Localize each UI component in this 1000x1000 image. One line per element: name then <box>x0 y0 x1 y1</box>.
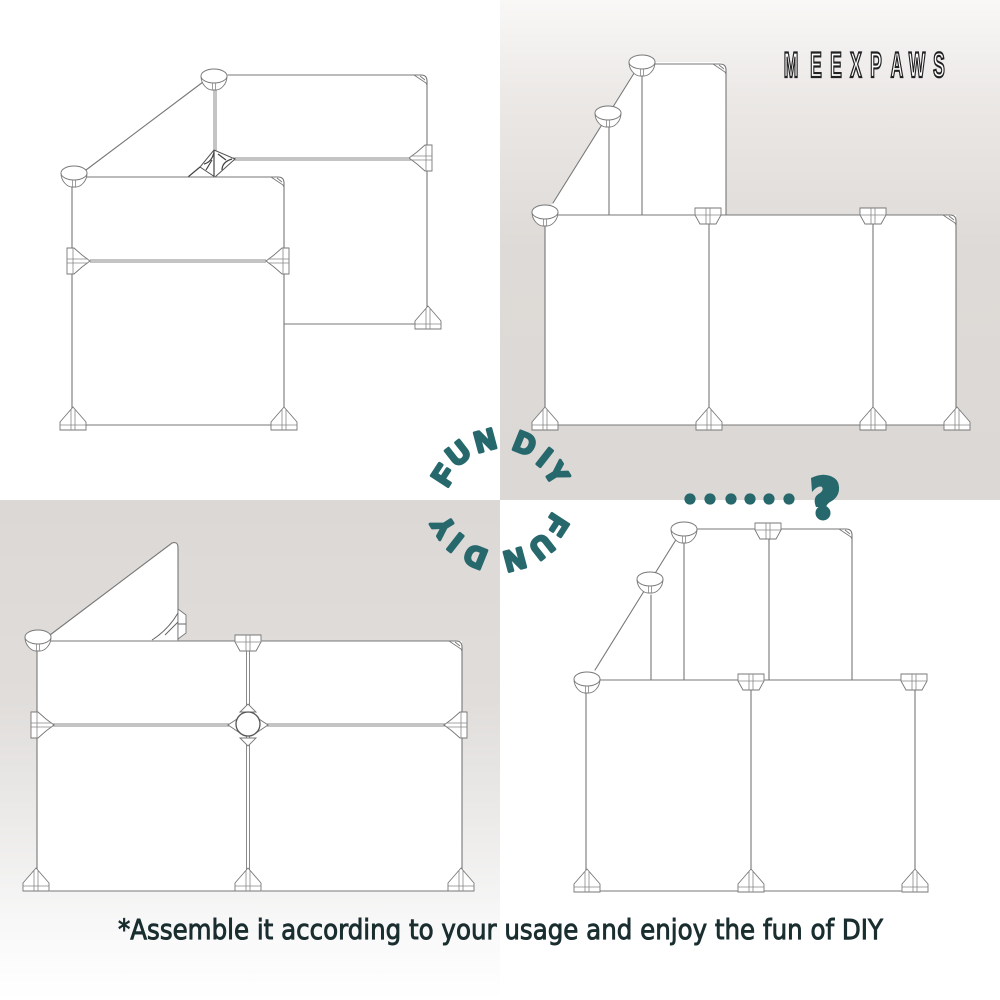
caption: *Assemble it according to your usage and enjoy the fun of DIY <box>118 913 884 946</box>
panel: front <box>72 177 284 425</box>
icon: question mark <box>811 475 839 520</box>
logo: MeexPaws: X <box>850 45 862 85</box>
diagram: bottom-right layout <box>574 522 928 892</box>
heading: FUN DIY upper arc: U <box>441 435 477 473</box>
logo: MeexPaws <box>784 45 945 85</box>
logo: MeexPaws: P <box>870 45 882 85</box>
logo: MeexPaws: E <box>810 45 822 85</box>
heading: FUN DIY lower arc: Y <box>426 510 463 543</box>
heading: FUN DIY lower arc: N <box>500 540 529 577</box>
heading: FUN DIY upper arc: D <box>509 426 540 463</box>
logo: MeexPaws: W <box>909 45 926 85</box>
logo: MeexPaws: M <box>784 45 798 85</box>
heading: FUN DIY upper arc: F <box>426 460 462 492</box>
diagram: top-left layout <box>60 69 441 430</box>
dotted line with question mark <box>684 475 839 520</box>
background quadrant: top right <box>500 0 1000 500</box>
heading: FUN DIY lower arc: I <box>443 527 469 557</box>
icon: centre connector <box>188 150 235 177</box>
heading: FUN DIY upper arc: I <box>531 443 557 473</box>
icon: centre hub <box>228 704 268 746</box>
logo: MeexPaws: S <box>933 45 945 85</box>
heading: FUN DIY upper arc: N <box>471 423 500 460</box>
logo: MeexPaws: E <box>830 45 842 85</box>
heading: FUN DIY lower arc: D <box>460 537 491 574</box>
heading: FUN DIY lower arc: F <box>538 508 574 540</box>
diagram: top-right layout <box>532 55 970 430</box>
heading: FUN DIY lower arc <box>426 508 574 577</box>
logo: MeexPaws: A <box>891 45 903 85</box>
heading: FUN DIY upper arc <box>426 423 574 492</box>
background quadrant: bottom left <box>0 500 500 1000</box>
icon: rear connector <box>152 609 186 640</box>
diagram: bottom-left layout <box>23 543 474 891</box>
heading: FUN DIY upper arc: Y <box>537 457 574 490</box>
heading: FUN DIY lower arc: U <box>523 527 559 565</box>
